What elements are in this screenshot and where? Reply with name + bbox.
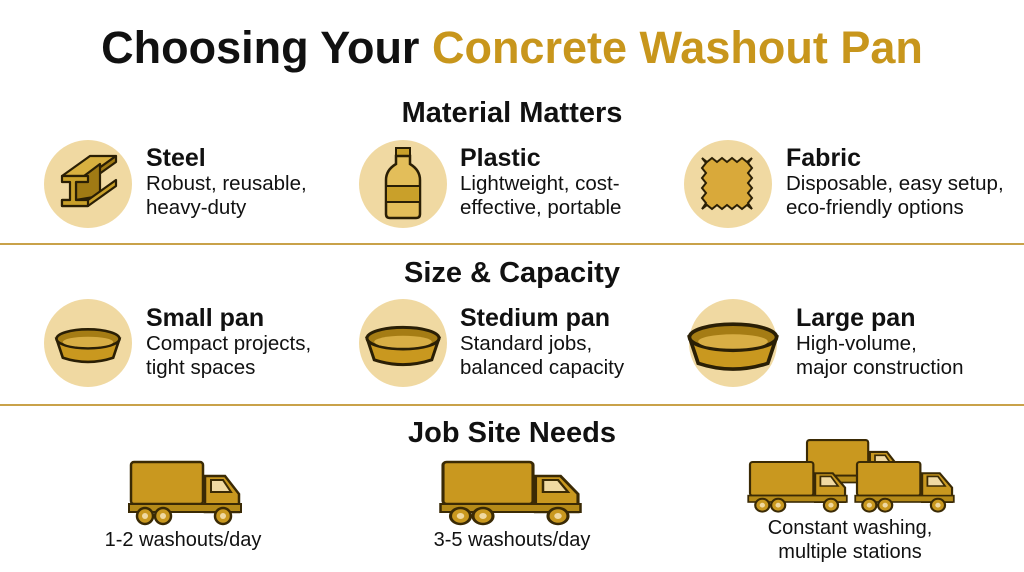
text: steel: Robust, reusable, bbox=[146, 172, 307, 195]
heading: material matters: Material Matters bbox=[402, 97, 622, 129]
text: steel bbox=[146, 144, 307, 219]
text: small pan: Compact projects, bbox=[146, 332, 311, 355]
text: plastic: Lightweight, cost- bbox=[460, 172, 620, 195]
text: steel: heavy-duty bbox=[146, 196, 246, 219]
text: large pan: major construction bbox=[796, 356, 963, 379]
icon: plastic bottle bbox=[359, 140, 447, 228]
text: plastic: effective, portable bbox=[460, 196, 621, 219]
text: fabric: Disposable, easy setup, bbox=[786, 172, 1004, 195]
icon: fabric bbox=[684, 140, 772, 228]
text: plastic bbox=[460, 144, 621, 219]
text: fabric bbox=[786, 144, 1004, 219]
icon: one truck bbox=[129, 462, 241, 524]
icon: steel beam bbox=[44, 140, 132, 228]
text: small pan: Small pan bbox=[146, 304, 264, 332]
text: medium pan bbox=[460, 304, 624, 379]
title: Choosing Your Concrete Washout Pan bbox=[101, 22, 923, 73]
text: medium pan: balanced capacity bbox=[460, 356, 624, 379]
label: 3-5: 3-5 washouts/day bbox=[434, 529, 590, 551]
text: large pan: High-volume, bbox=[796, 332, 917, 355]
text: small pan bbox=[146, 304, 311, 379]
heading: job site: Job Site Needs bbox=[408, 417, 616, 449]
text: small pan: tight spaces bbox=[146, 356, 255, 379]
icon: fleet bbox=[748, 440, 954, 512]
text: fabric: eco-friendly options bbox=[786, 196, 964, 219]
text: large pan: Large pan bbox=[796, 304, 915, 332]
text: plastic: Plastic bbox=[460, 144, 541, 172]
label: constant: Constant washing, bbox=[768, 517, 932, 539]
label: constant bbox=[768, 517, 932, 563]
label: constant: multiple stations bbox=[778, 541, 922, 563]
text: fabric: Fabric bbox=[786, 144, 861, 172]
text: steel: Steel bbox=[146, 144, 206, 172]
text: large pan bbox=[796, 304, 963, 379]
text: medium pan: Stedium pan bbox=[460, 304, 610, 332]
icon: bigger truck bbox=[440, 462, 580, 524]
icon: small pan bbox=[44, 299, 132, 387]
icon: large pan bbox=[689, 299, 777, 387]
heading: size: Size & Capacity bbox=[404, 257, 620, 289]
label: 1-2: 1-2 washouts/day bbox=[105, 529, 261, 551]
text: medium pan: Standard jobs, bbox=[460, 332, 592, 355]
icon: medium pan bbox=[359, 299, 447, 387]
